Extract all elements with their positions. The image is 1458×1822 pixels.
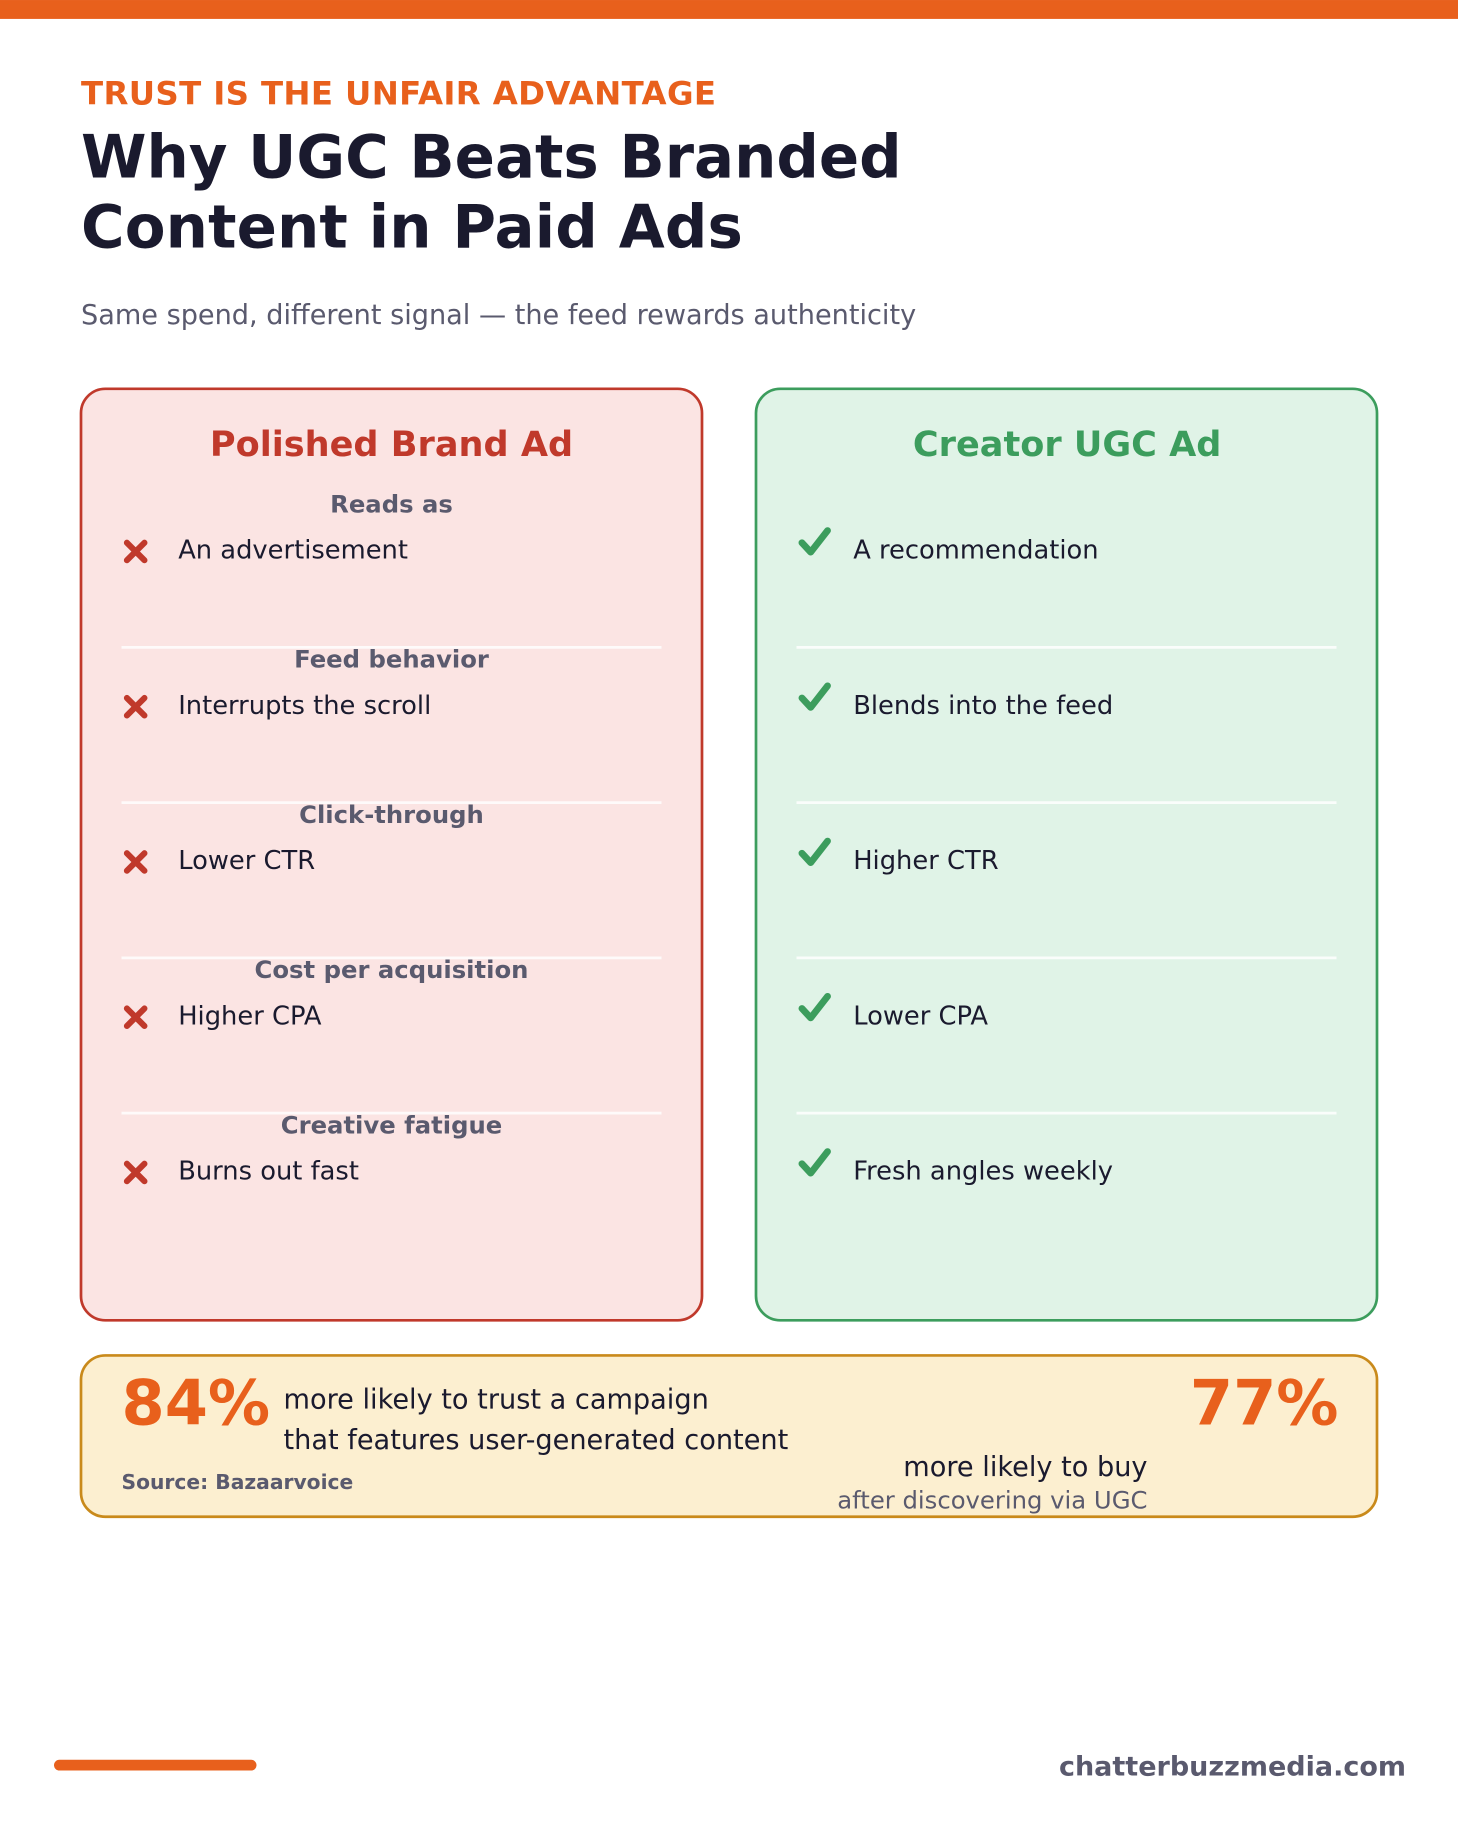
row: feed behavior: Interrupts the scroll <box>178 691 431 721</box>
row: creative fatigue: Creative fatigue <box>281 1110 502 1139</box>
row: higher ctr: Higher CTR <box>853 846 999 876</box>
stat: 84%: 84% <box>122 1366 270 1439</box>
top accent bar <box>0 0 1458 19</box>
row: fresh angles: Fresh angles weekly <box>853 1157 1113 1187</box>
row: lower cpa: Lower CPA <box>853 1001 988 1031</box>
row: click-through: Lower CTR <box>178 846 315 876</box>
title: Content in Paid Ads <box>81 194 743 263</box>
row: creative fatigue <box>127 1110 502 1187</box>
source: Source: Bazaarvoice <box>122 1470 353 1494</box>
row: cost per acquisition: Higher CPA <box>178 1001 322 1031</box>
callout: stats band <box>81 1355 1377 1517</box>
footer url: chatterbuzzmedia.com <box>1059 1752 1406 1783</box>
row: reads as: Reads as <box>330 489 453 518</box>
row: higher ctr <box>802 841 999 876</box>
stat text: buy: more likely to buy <box>903 1452 1147 1483</box>
row: feed behavior: Feed behavior <box>294 645 489 674</box>
row: click-through: Click-through <box>299 800 484 829</box>
row: feed behavior <box>127 645 489 721</box>
stat subtext: discovery: after discovering via UGC <box>837 1486 1148 1515</box>
eyebrow heading: TRUST IS THE UNFAIR ADVANTAGE <box>81 75 716 113</box>
title: Why UGC Beats Branded <box>81 124 902 193</box>
stat text: trust <box>284 1384 788 1456</box>
row: creative fatigue: Burns out fast <box>178 1157 359 1187</box>
stat text: trust: more likely to trust a campaign <box>284 1384 709 1415</box>
row: click-through <box>127 800 484 876</box>
row: lower cpa <box>802 996 988 1031</box>
row: cost per acquisition: Cost per acquisition <box>255 955 528 984</box>
panel: polished brand ad <box>81 389 702 1320</box>
panel heading: creator: Creator UGC Ad <box>913 424 1221 465</box>
row: cost per acquisition <box>127 955 528 1031</box>
stat: 77%: 77% <box>1190 1366 1339 1439</box>
panel: creator ugc ad <box>756 389 1377 1320</box>
title <box>81 124 902 263</box>
footer accent bar <box>54 1760 256 1771</box>
panel heading: brand: Polished Brand Ad <box>210 424 573 465</box>
stat text: trust: that features user-generated content <box>284 1425 788 1456</box>
subtitle: Same spend, different signal — the feed rewards authenticity <box>81 300 916 331</box>
row: reads as <box>127 489 453 566</box>
row: blends: Blends into the feed <box>853 691 1113 721</box>
row: recommendation: A recommendation <box>853 536 1099 566</box>
row: reads as: An advertisement <box>178 536 408 566</box>
